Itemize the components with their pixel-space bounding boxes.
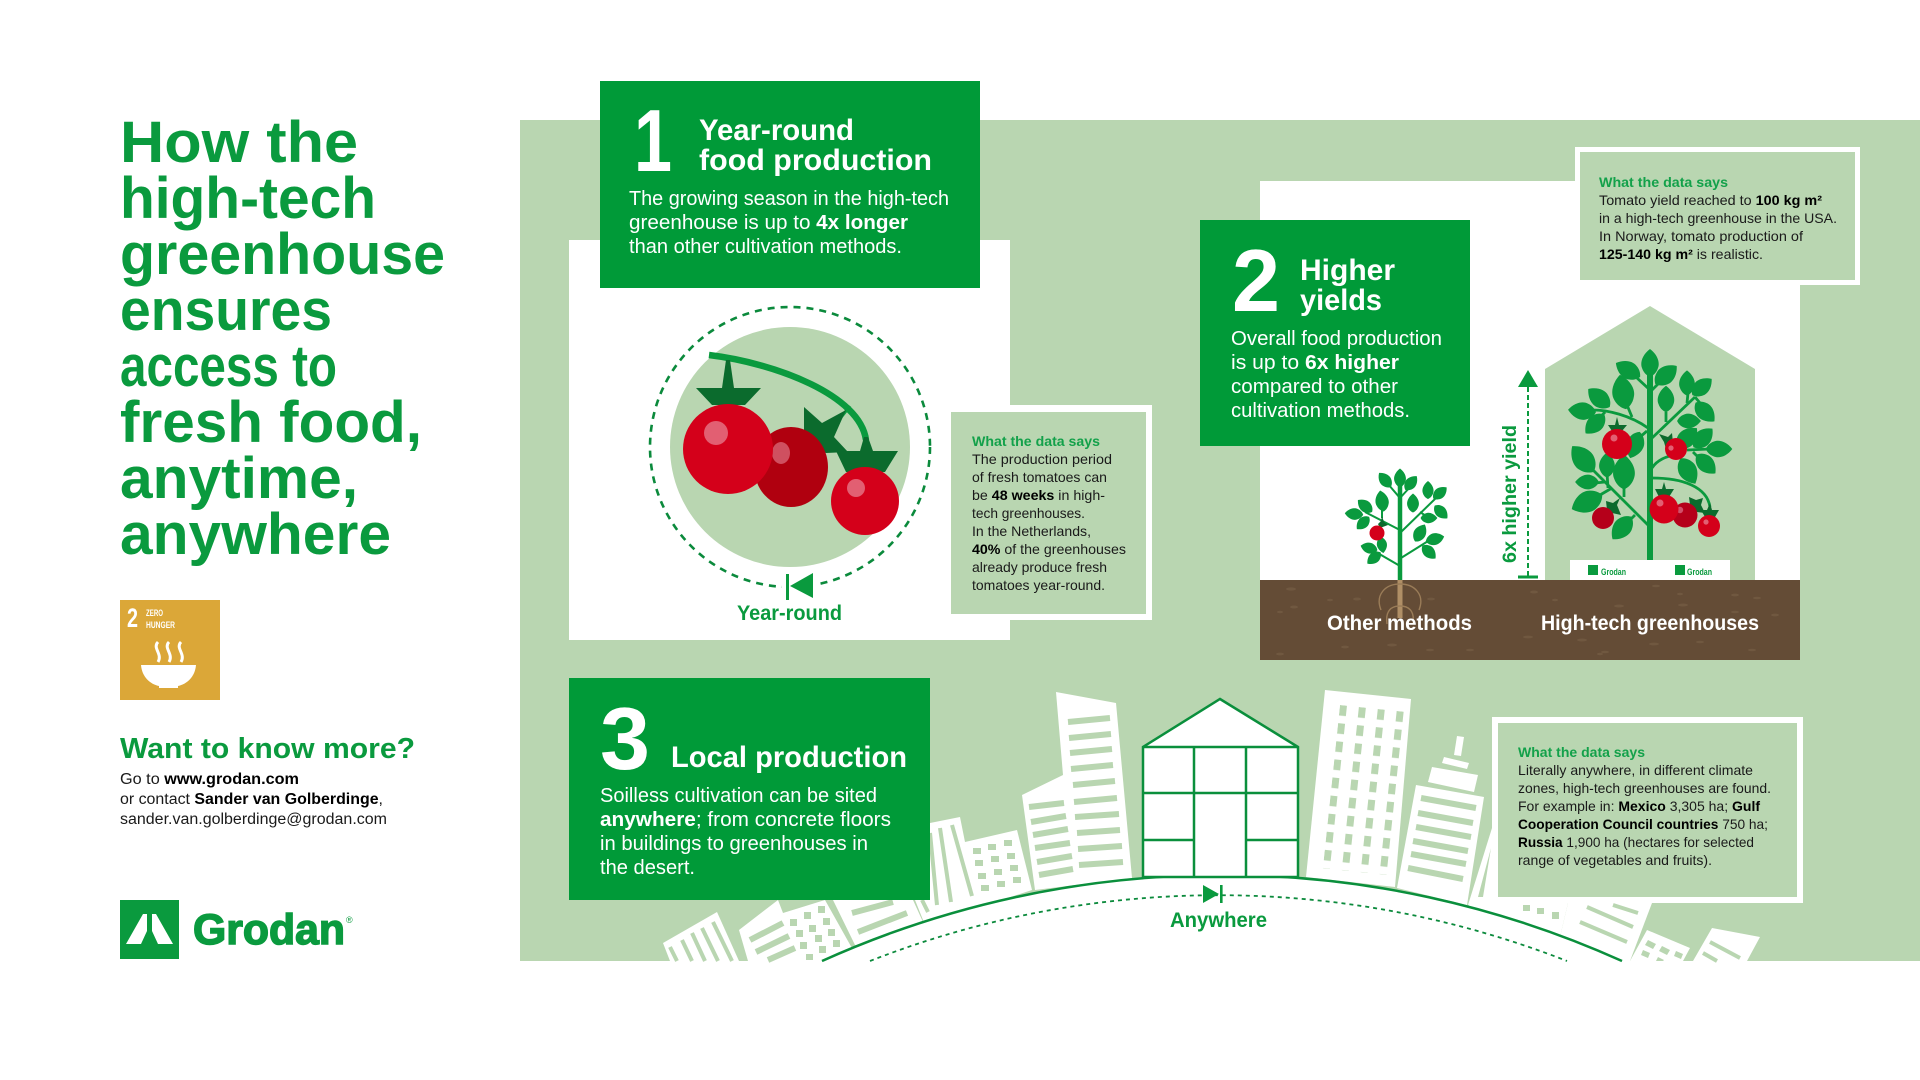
callout: data box 1: already produce fresh — [972, 559, 1107, 575]
planet curve — [822, 875, 1622, 961]
spire tower — [1397, 736, 1498, 905]
callout: data box 3: What the data says — [1518, 744, 1645, 760]
title — [120, 110, 445, 567]
panel: box 2 higher yields: yields — [1300, 284, 1382, 317]
callout: data box 2: in a high-tech greenhouse in the USA. — [1599, 210, 1837, 226]
panel: box 1 year-round food production: greenhouse is up to 4x longer — [629, 212, 908, 234]
right tall tower — [1306, 690, 1414, 887]
arrow: year-round marker — [786, 573, 813, 600]
icon: SDG 2 zero hunger: ZERO — [146, 608, 163, 618]
panel: box 2 higher yields — [1200, 220, 1470, 446]
panel: box 3 local production: the desert. — [600, 857, 695, 879]
title: access to — [120, 334, 337, 399]
panel: box 3 local production: 3 — [600, 689, 650, 788]
callout: data box 1 — [945, 405, 1152, 620]
lower left buildings — [663, 900, 923, 961]
panel: box 2 higher yields: cultivation methods. — [1231, 400, 1410, 422]
panel: box 2 higher yields: Overall food production — [1231, 328, 1442, 350]
background panel — [520, 120, 1920, 961]
soil band: Other methods — [1327, 612, 1472, 635]
title: anywhere — [120, 502, 391, 567]
panel: box 1 year-round food production: Year-round — [699, 114, 854, 147]
panel: box 3 local production: Soilless cultivation can be sited — [600, 785, 877, 807]
grodan slabs: Grodan — [1687, 567, 1712, 577]
curve outline — [822, 875, 1622, 961]
callout: data box 3: range of vegetables and fruits). — [1518, 852, 1712, 868]
panel: box 2 higher yields: compared to other — [1231, 376, 1398, 398]
callout: data box 2: In Norway, tomato production of — [1599, 228, 1803, 244]
big tomato plant — [1564, 349, 1732, 560]
callout: data box 2: Tomato yield reached to 100 kg m² — [1599, 192, 1822, 208]
panel: box 2 higher yields: Higher — [1300, 254, 1395, 287]
icon: SDG 2 zero hunger: 2 — [127, 603, 138, 633]
panel: box 1 year-round food production: food production — [699, 144, 932, 177]
panel: yield illustration — [1260, 181, 1800, 660]
logo: Grodan: ® — [346, 915, 353, 925]
callout: data box 3: Cooperation Council countries 750 ha; — [1518, 816, 1768, 832]
callout: data box 1: The production period — [972, 451, 1112, 467]
logo: Grodan — [120, 900, 353, 959]
panel: box 3 local production: in buildings to greenhouses in — [600, 833, 868, 855]
callout: data box 3: zones, high-tech greenhouses are found. — [1518, 780, 1771, 796]
callout: data box 1: tomatoes year-round. — [972, 577, 1105, 593]
arrow: anywhere marker — [1203, 885, 1223, 903]
callout: data box 2 — [1575, 147, 1860, 285]
title: high-tech — [120, 166, 376, 231]
grodan slabs: Grodan — [1601, 567, 1626, 577]
callout: data box 2: What the data says — [1599, 174, 1728, 190]
title: greenhouse — [120, 222, 445, 287]
label: year-round: Year-round — [737, 602, 842, 625]
soil band: High-tech greenhouses — [1541, 612, 1759, 635]
callout: data box 2: 125-140 kg m² is realistic. — [1599, 246, 1763, 262]
callout: data box 3: Russia 1,900 ha (hectares for selected — [1518, 834, 1754, 850]
panel: box 1 year-round food production: 1 — [634, 91, 672, 190]
arrow: 6x higher yield — [1500, 370, 1538, 577]
want to know more: sander.van.golberdinge@grodan.com — [120, 811, 387, 828]
title: anytime, — [120, 446, 358, 511]
callout: data box 3 — [1492, 717, 1803, 903]
tomato illustration — [650, 307, 930, 602]
callout: data box 3: Literally anywhere, in different climate — [1518, 762, 1753, 778]
panel: box 2 higher yields: is up to 6x higher — [1231, 352, 1399, 374]
callout: data box 1: What the data says — [972, 433, 1100, 449]
lower right buildings — [1468, 897, 1760, 961]
panel: box 1 year-round food production: than other cultivation methods. — [629, 236, 902, 258]
small tomato plant — [1344, 468, 1451, 580]
stripe building — [915, 817, 1032, 925]
callout: data box 3: For example in: Mexico 3,305 ha; Gulf — [1518, 798, 1760, 814]
want to know more: or contact Sander van Golberdinge , — [120, 791, 383, 808]
callout: data box 1: be 48 weeks in high- — [972, 487, 1105, 503]
panel: box 2 higher yields: 2 — [1232, 231, 1280, 330]
tall tower with bars — [1022, 692, 1132, 890]
icon: SDG 2 zero hunger: HUNGER — [146, 620, 175, 630]
want to know more — [120, 733, 415, 828]
callout: data box 1: In the Netherlands, — [972, 523, 1091, 539]
panel: year-round illustration — [569, 240, 1010, 640]
panel: box 1 year-round food production — [600, 81, 980, 288]
callout: data box 1: of fresh tomatoes can — [972, 469, 1107, 485]
panel: box 3 local production: Local production — [671, 741, 907, 774]
panel: box 3 local production: anywhere; from concrete floors — [600, 809, 891, 831]
logo: Grodan: Grodan — [193, 906, 345, 954]
want to know more: Want to know more? — [120, 733, 415, 765]
greenhouse outline — [1143, 699, 1298, 877]
soil band — [1260, 580, 1800, 660]
greenhouse silhouette — [1545, 306, 1755, 581]
want to know more: Go to www.grodan.com — [120, 771, 299, 788]
title: ensures — [120, 278, 332, 343]
title: fresh food, — [120, 390, 422, 455]
city skyline — [663, 690, 1760, 961]
label: anywhere: Anywhere — [1170, 909, 1267, 932]
grodan slabs — [1570, 560, 1730, 580]
title: How the — [120, 110, 358, 175]
callout: data box 1: tech greenhouses. — [972, 505, 1085, 521]
panel: box 3 local production — [569, 678, 930, 900]
arrow: 6x higher yield: 6x higher yield — [1500, 425, 1521, 563]
panel: box 1 year-round food production: The growing season in the high-tech — [629, 188, 949, 210]
icon: SDG 2 zero hunger — [120, 600, 220, 700]
callout: data box 1: 40% of the greenhouses — [972, 541, 1126, 557]
dashed orbit — [870, 895, 1567, 961]
